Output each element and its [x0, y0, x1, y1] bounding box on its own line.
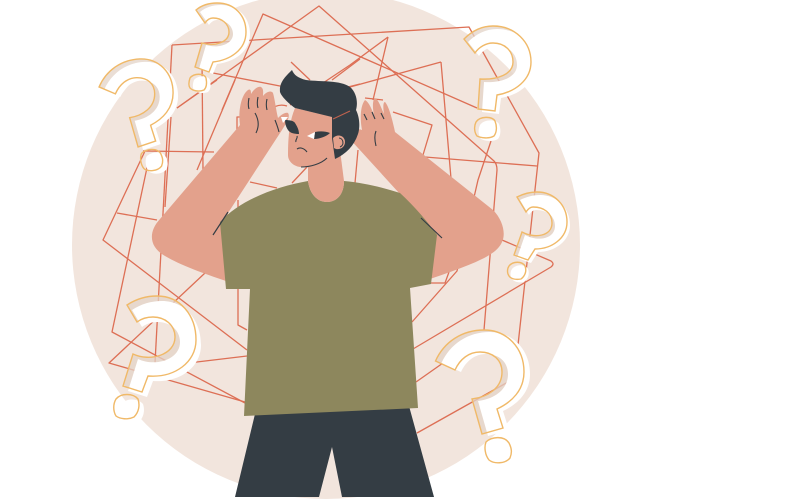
man figure: [152, 70, 504, 497]
facial lines: [296, 136, 343, 167]
question mark: middle right: [508, 192, 570, 282]
question mark: top right: [464, 26, 535, 141]
tangled thought lines: [103, 6, 553, 433]
right arm and hand: [348, 98, 504, 279]
question mark: top small: [189, 3, 250, 93]
face: [288, 108, 336, 167]
hair highlight: [333, 111, 350, 119]
trousers: [235, 406, 434, 497]
ear: [333, 135, 345, 149]
shirt: [220, 181, 437, 416]
left arm and hand: [152, 87, 289, 281]
left eye: [285, 120, 299, 134]
finger lines: [248, 97, 384, 146]
background circle: [72, 0, 580, 499]
question mark: bottom right: [436, 330, 530, 465]
right eye white: [307, 132, 315, 139]
hair: [280, 70, 359, 159]
left eye white: [281, 117, 288, 123]
sleeve creases: [213, 212, 442, 238]
question mark: bottom left: [114, 296, 201, 424]
right eye: [314, 131, 330, 139]
neck: [308, 150, 344, 202]
question mark: top left large: [99, 57, 178, 176]
